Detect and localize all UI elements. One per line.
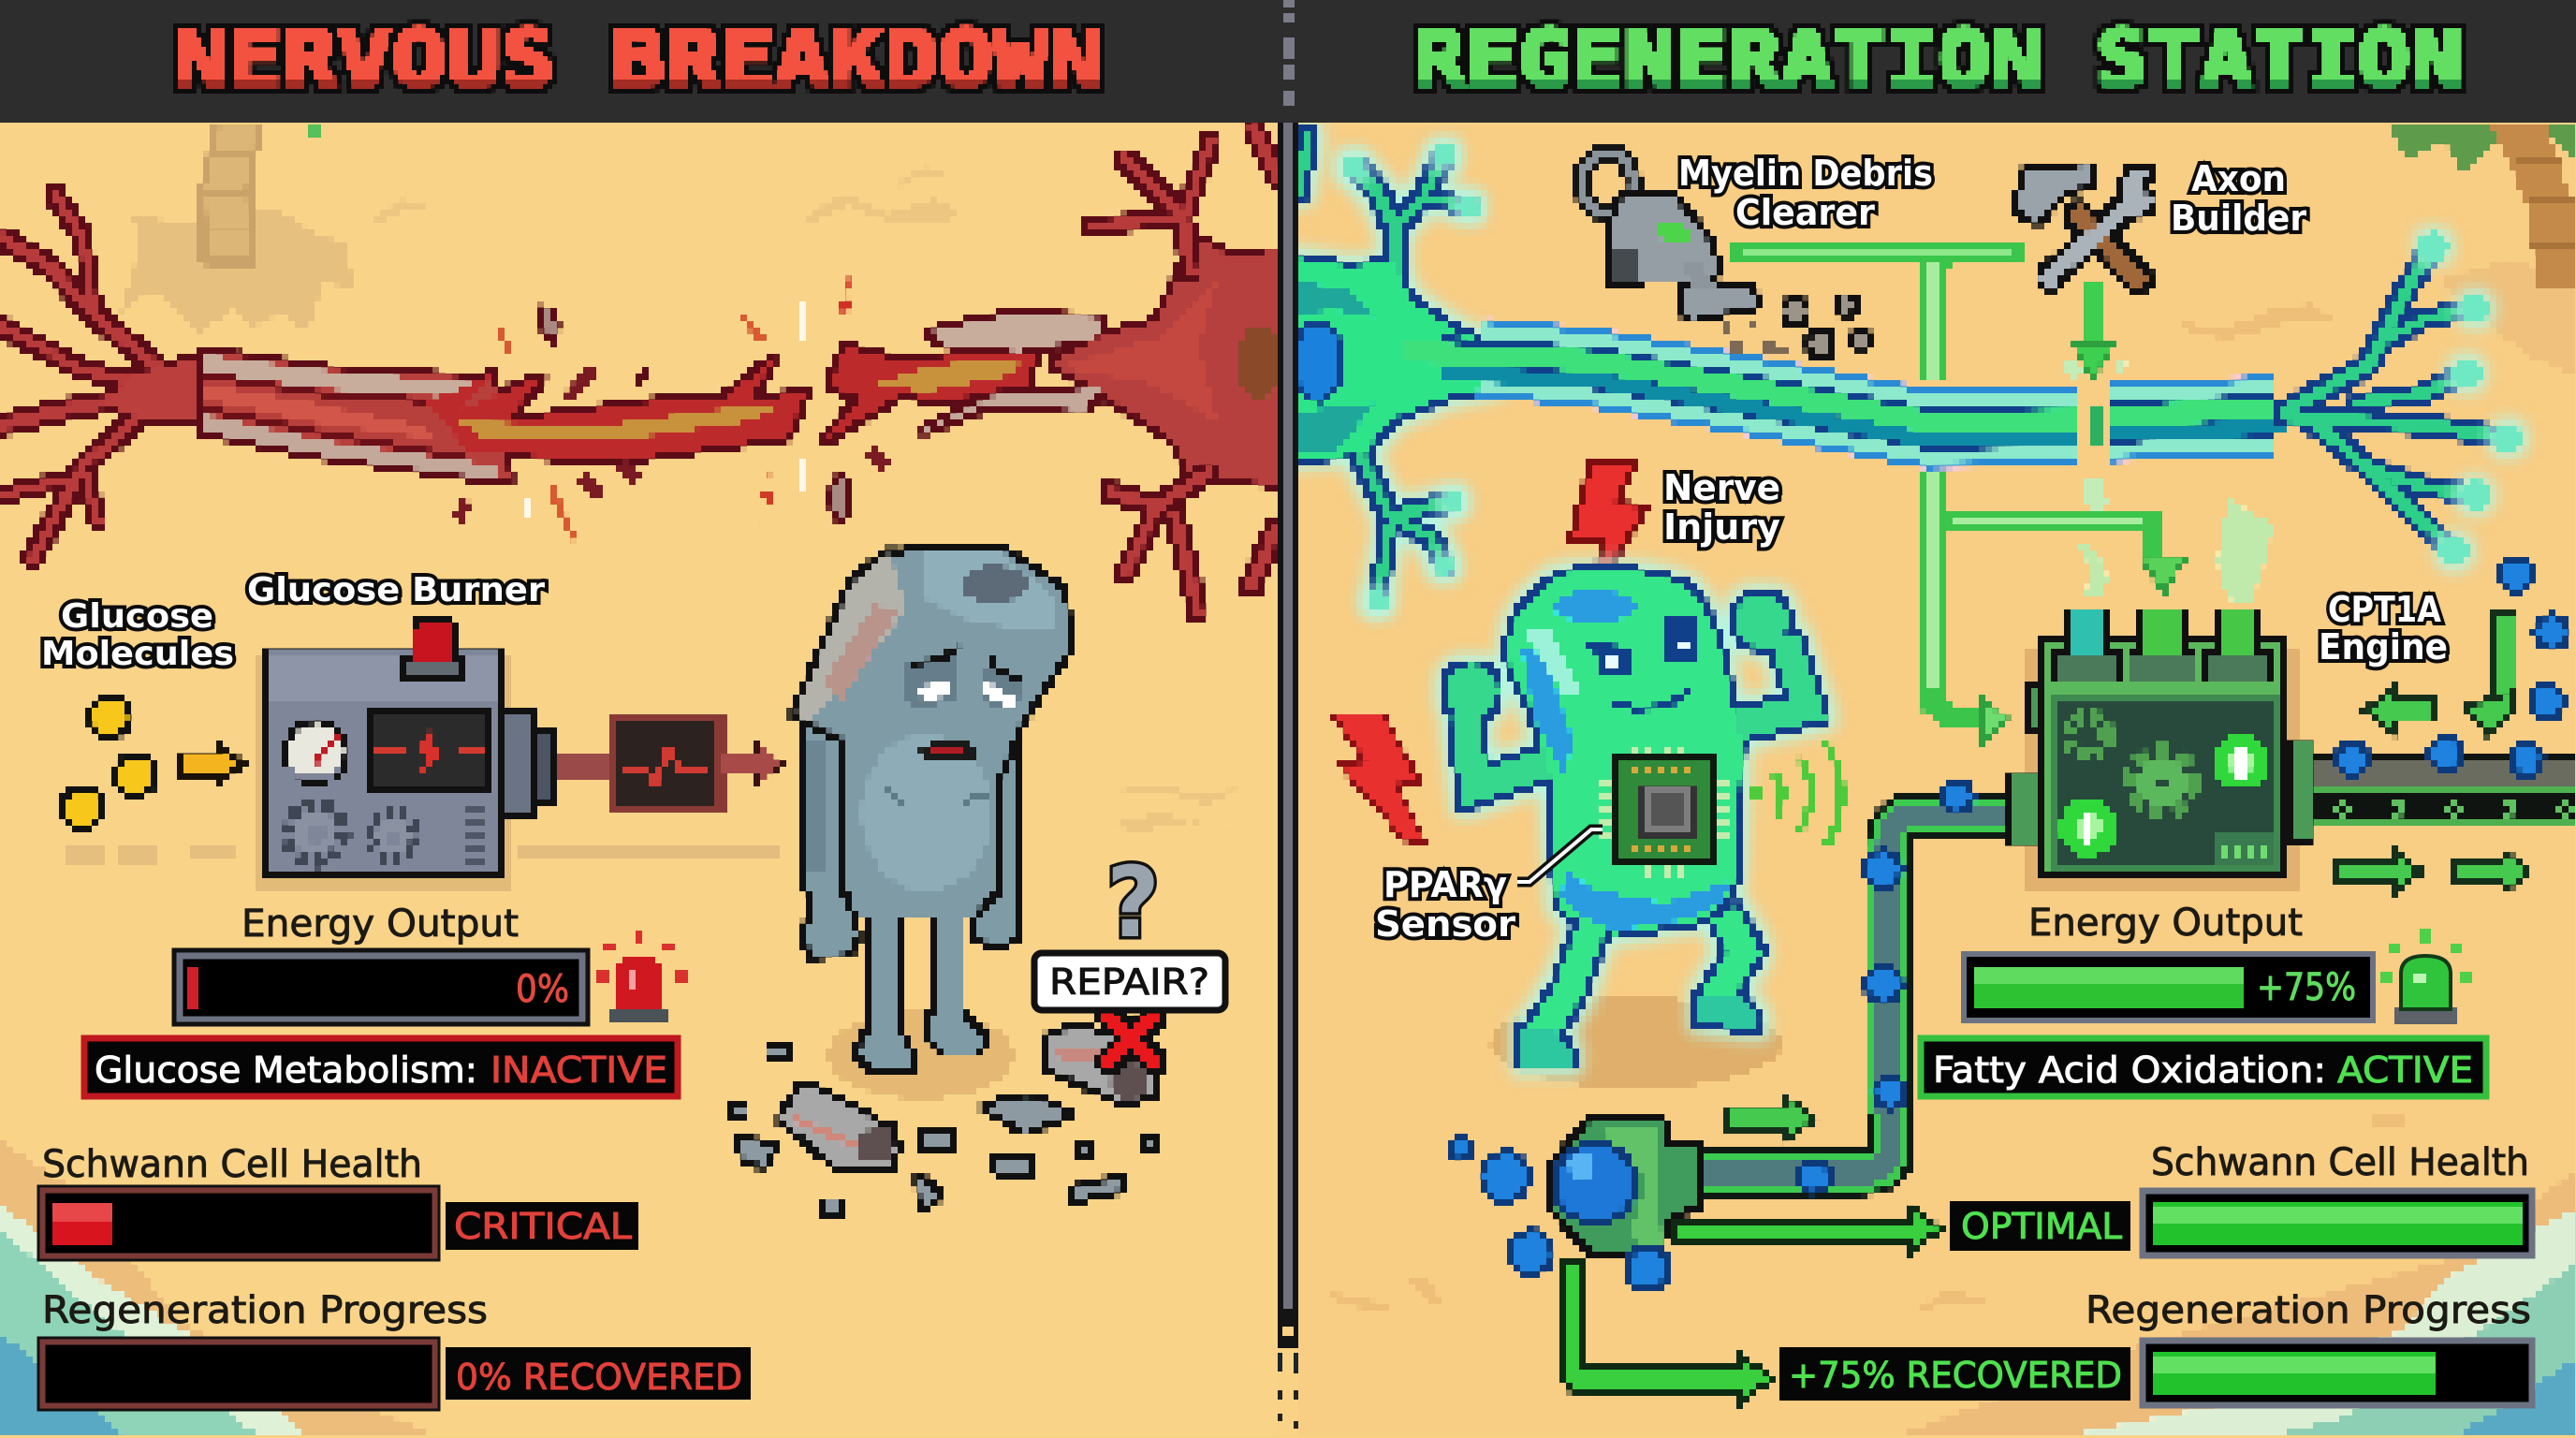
CPT1A engine <box>2010 612 2314 891</box>
sand background right <box>1298 123 2576 1438</box>
conveyor belt <box>2314 755 2576 828</box>
alarm light red <box>594 930 685 1024</box>
palm tree right <box>2389 123 2576 377</box>
meter: schwann cell health left: Schwann Cell Health <box>42 1143 422 1186</box>
meter: schwann cell health right: Schwann Cell Health <box>2151 1141 2529 1184</box>
highlight <box>1524 627 1582 693</box>
green character shading <box>1521 646 1732 931</box>
connector <box>504 713 552 816</box>
side bolt <box>1331 714 1426 843</box>
shoreline left <box>0 1140 440 1438</box>
engine smoke <box>2076 499 2274 604</box>
meter: schwann cell health right <box>1950 1141 2532 1255</box>
labels right: Builder <box>2171 198 2306 239</box>
strong green schwann cell character <box>1445 570 1841 1089</box>
arrow: down into engine <box>2142 558 2185 594</box>
critical tag: CRITICAL <box>454 1206 632 1247</box>
engine gears <box>2070 717 2188 808</box>
molecule shadows <box>66 844 235 863</box>
header bar <box>0 0 2576 123</box>
labels right: Injury <box>1663 506 1780 548</box>
title right: REGENERATION STATION <box>1413 13 2463 105</box>
status: fatty acid oxidation active: Fatty Acid Oxidation: <box>1933 1049 2326 1091</box>
repair speech bubble <box>1034 953 1225 1010</box>
sensor signal arcs <box>1752 741 1841 846</box>
left axon stump with torn myelin <box>201 351 805 480</box>
labels right: Clearer <box>1735 192 1875 233</box>
glucose burner machine <box>254 622 783 888</box>
gauge: energy output right: Energy Output <box>2028 902 2303 945</box>
meter: regeneration progress right <box>1779 1289 2532 1405</box>
labels left: Molecules <box>41 635 234 673</box>
shattered myelin debris <box>735 1028 1154 1213</box>
character ground shadow <box>827 1011 1015 1099</box>
optimal tag: OPTIMAL <box>1961 1206 2122 1247</box>
alarm light green <box>2380 929 2472 1024</box>
red X mark <box>1105 1011 1159 1065</box>
sand background left <box>0 123 1278 1438</box>
center divider <box>1278 0 1298 1429</box>
meter: regeneration progress left <box>38 1289 751 1410</box>
character eyes and mouth <box>887 646 1020 810</box>
arrow: hook down <box>2466 610 2516 734</box>
right axon fragment and soma <box>826 242 1310 487</box>
right axon terminals <box>2284 246 2508 551</box>
arrow: pump to recovered <box>1560 1264 1772 1402</box>
green pathway from clearer and builder <box>1732 242 2164 695</box>
labels right: Sensor <box>1375 903 1515 945</box>
ECG monitor <box>612 719 721 811</box>
soma nucleus <box>1294 322 1342 401</box>
scattered fragments <box>735 1047 1154 1213</box>
labels right: Engine <box>2319 626 2448 668</box>
vents <box>462 809 488 861</box>
nerve injury bolt <box>1570 464 1649 595</box>
gauge: energy output right <box>1964 902 2373 1020</box>
repair speech bubble: REPAIR? <box>1049 961 1209 1003</box>
face <box>1582 618 1695 709</box>
large broken piece <box>782 1084 897 1166</box>
labels right: Nerve <box>1663 467 1780 508</box>
tired grey schwann cell character <box>795 549 1069 1099</box>
sand ripple marks right <box>1330 303 2404 1314</box>
energy label: Energy Output <box>242 902 519 946</box>
labels right: Myelin Debris <box>1678 153 1933 194</box>
red button <box>408 622 461 676</box>
fatty acid pipe <box>1694 814 2012 1173</box>
machine body <box>267 649 501 876</box>
glowing energy orbs <box>2059 733 2269 857</box>
green character body and limbs <box>1445 570 1808 1065</box>
broken piece under repair bubble <box>1046 1028 1151 1101</box>
arrow: burner output <box>721 741 783 786</box>
fiber debris and sparks <box>457 270 887 540</box>
head cap <box>1553 591 1637 623</box>
glucose molecules <box>62 696 156 829</box>
labels right: Axon <box>2191 158 2286 199</box>
status: glucose metabolism inactive: Glucose Metabolism: <box>95 1049 477 1091</box>
left dendrites and soma <box>1292 137 1498 602</box>
output bar <box>554 753 612 777</box>
labels left: Glucose <box>61 597 213 636</box>
green character ground shadow <box>1490 997 1782 1089</box>
glowing terminal tips <box>1342 144 2523 612</box>
fatty acid source pump <box>1554 1122 1699 1255</box>
status: glucose metabolism inactive <box>84 1038 678 1096</box>
panel: nervous breakdown (left) <box>0 123 1310 1438</box>
engine body <box>2043 638 2285 875</box>
sensor chip <box>1599 745 1728 878</box>
recovered tag right: +75% RECOVERED <box>1789 1355 2122 1396</box>
engine indicator <box>2213 833 2275 865</box>
recovered tag left: 0% RECOVERED <box>456 1357 742 1398</box>
sand ripple marks left <box>370 167 1250 833</box>
labels left: Glucose Burner <box>247 571 545 609</box>
engine cylinders <box>2058 612 2268 679</box>
vacuumed debris <box>1785 298 1866 354</box>
status: fatty acid oxidation active: ACTIVE <box>2337 1049 2473 1091</box>
palm tree with shadow left <box>119 123 353 335</box>
left dendrites <box>0 193 211 558</box>
energy bar frame <box>180 956 582 1020</box>
labels right: CPT1A <box>2328 589 2442 630</box>
gauge: energy output right: +75% <box>2257 966 2356 1009</box>
arrow: glucose to burner <box>180 743 243 785</box>
character legs <box>859 913 983 1071</box>
severed red neuron <box>0 125 1310 612</box>
axon repair gap <box>2064 360 2127 517</box>
gauge <box>285 721 347 783</box>
engine nubs <box>2010 685 2314 846</box>
arrow: builder to axon <box>2072 285 2114 379</box>
arrow: into engine left <box>2364 689 2437 732</box>
right arm <box>975 740 1017 946</box>
right panel illustration layer <box>1292 123 2576 1438</box>
glowing regenerated neuron <box>1292 137 2523 612</box>
labels left <box>41 571 545 673</box>
left arm <box>803 712 856 955</box>
labels right: PPARγ <box>1383 864 1507 905</box>
hammer and wrench: axon builder <box>2016 167 2153 286</box>
myelinated axon <box>1404 352 2312 440</box>
nucleus <box>1237 325 1281 400</box>
labels right <box>1375 153 2448 945</box>
sensor leader line <box>1517 829 1603 882</box>
energy value: 0% <box>516 968 569 1011</box>
arrow: pathway into engine <box>1932 688 2007 743</box>
status: glucose metabolism inactive: INACTIVE <box>490 1049 667 1091</box>
upper right dendrites <box>1092 125 1278 612</box>
left panel illustration layer <box>0 123 1310 1438</box>
arrow: pump output top <box>1728 1097 1816 1140</box>
question mark: ? <box>1106 845 1160 960</box>
titles <box>173 13 2463 105</box>
meter: regeneration progress right: Regeneration Progress <box>2086 1289 2531 1332</box>
vacuum: myelin debris clearer <box>1582 153 1866 356</box>
status: fatty acid oxidation active <box>1921 1038 2486 1096</box>
title left: NERVOUS BREAKDOWN <box>173 13 1103 105</box>
meter: schwann cell health left <box>38 1143 638 1260</box>
character body <box>795 549 1069 915</box>
gauge: energy output left <box>174 902 588 1024</box>
burner screen <box>370 710 488 788</box>
arrow: output one <box>2337 851 2422 892</box>
meter: regeneration progress left: Regeneration Progress <box>42 1289 488 1332</box>
arrow: pump to optimal <box>1676 1206 1941 1253</box>
arrow: output two <box>2454 851 2531 892</box>
energy bar fill <box>187 967 198 1009</box>
shoreline right <box>1890 1167 2576 1438</box>
gears <box>288 806 416 860</box>
fatty acid beads <box>1449 558 2569 1290</box>
